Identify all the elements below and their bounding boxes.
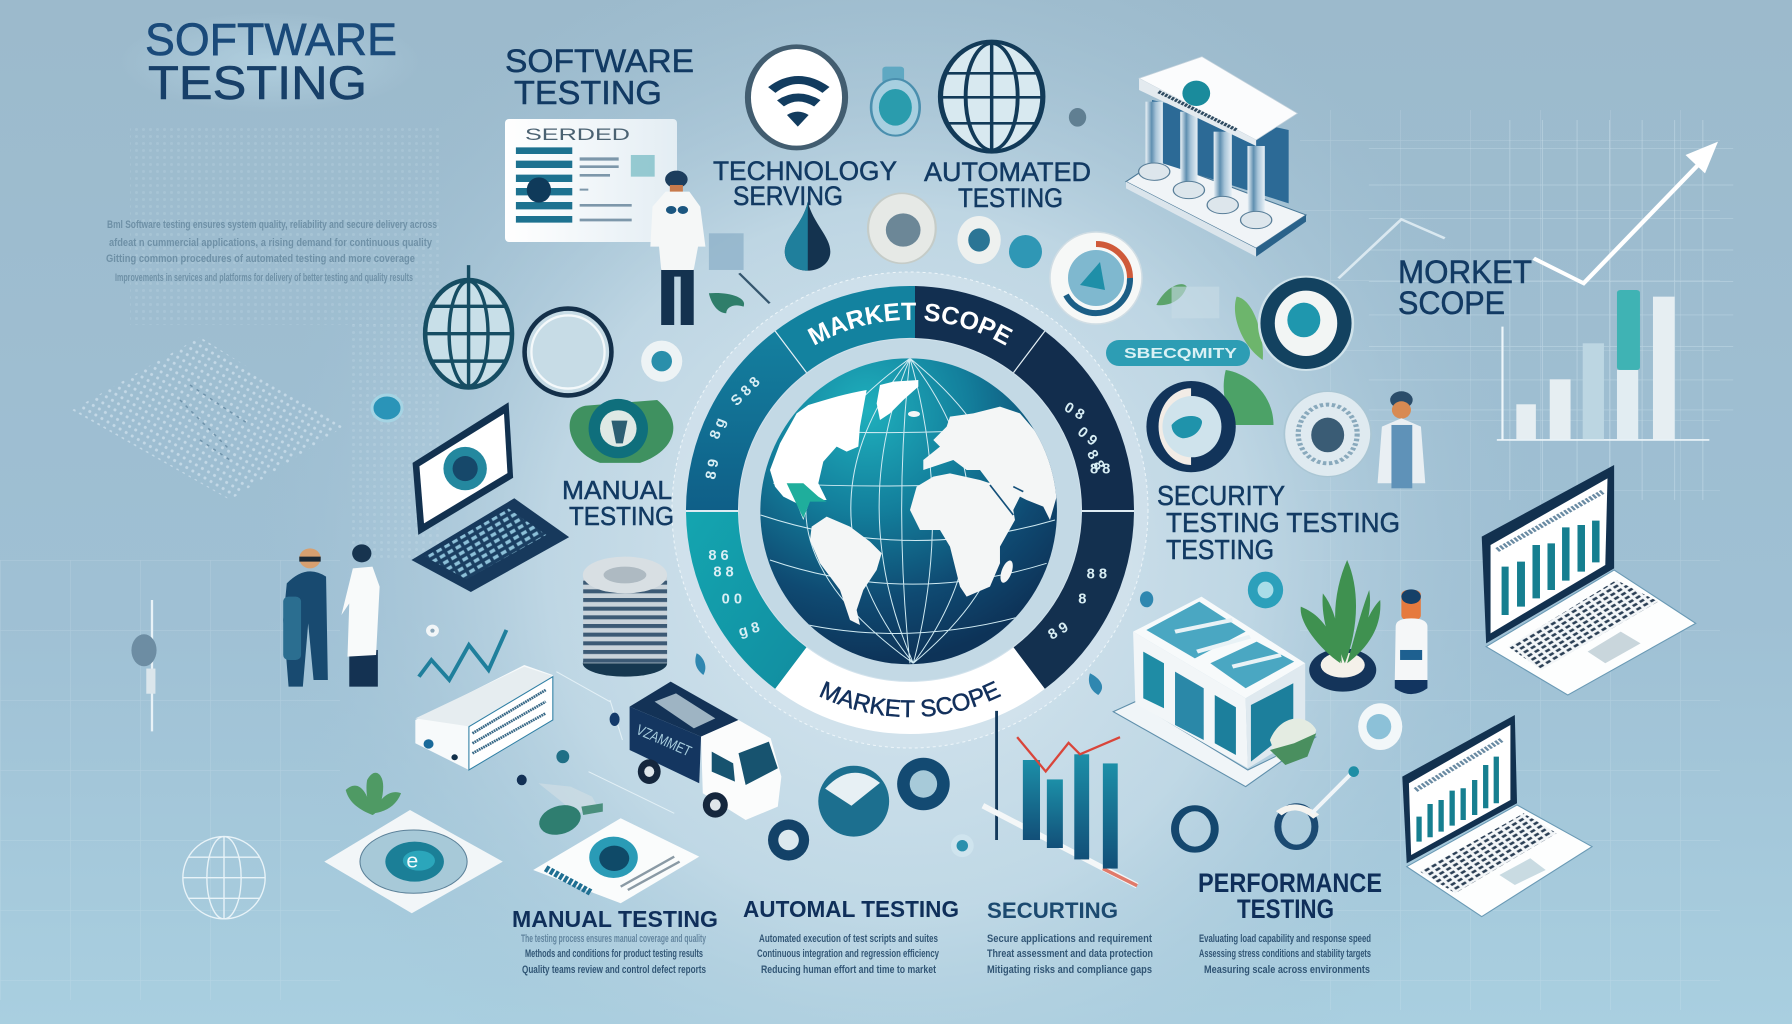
- icon: delivery truck: [630, 682, 781, 820]
- icon: lens badges: [868, 108, 1086, 268]
- heading: technology serving: [713, 156, 897, 211]
- heading: automated testing: TESTING: [958, 183, 1063, 213]
- icon: printer device with pulse line: [415, 625, 553, 770]
- Red Sea and gulf: [990, 485, 1023, 515]
- ring segment labels: 8: [1078, 591, 1086, 607]
- column: securting: SECURTING: [987, 898, 1118, 923]
- column: manual testing: MANUAL TESTING: [512, 906, 718, 932]
- heading: technology serving: SERVING: [733, 181, 843, 211]
- ring segment: top left: [775, 286, 915, 373]
- heading: market scope right: SCOPE: [1398, 285, 1505, 321]
- heading: security testing: [1157, 480, 1400, 565]
- heading: technology serving: TECHNOLOGY: [713, 156, 897, 186]
- left description text: Bml Software testing ensures system quality, reliability and secure delivery across: [107, 219, 437, 231]
- icon: data building: [1113, 597, 1316, 787]
- continent: South America: [810, 517, 882, 625]
- ring segment: top right: [915, 286, 1045, 373]
- main title: [120, 12, 420, 112]
- ring heading: market scope top: [720, 320, 1100, 510]
- icon: server stack: [583, 557, 667, 677]
- left description text: [106, 219, 437, 284]
- heading: manual testing: [562, 475, 674, 531]
- column: securting: [987, 898, 1153, 976]
- heading: market scope right: MORKET: [1398, 254, 1532, 290]
- ring segment labels: 0 0: [722, 591, 742, 607]
- heading: security testing: SECURITY: [1157, 480, 1285, 511]
- icon: security ring: [1146, 381, 1236, 472]
- globe: [760, 358, 1057, 664]
- icon: probe left: [131, 600, 157, 731]
- continent: North America: [770, 390, 867, 520]
- globe grid lines: [761, 358, 1055, 663]
- ring segment labels: 8: [747, 374, 764, 391]
- column: performance description: Evaluating load capability and response speed: [1199, 933, 1371, 945]
- icon: globe badge: [940, 42, 1043, 152]
- heading: manual testing: TESTING: [569, 501, 674, 531]
- chart: market growth: [1339, 120, 1733, 500]
- main title: TESTING: [148, 56, 367, 109]
- heading: market scope right: [1398, 254, 1532, 321]
- left description text: Gitting common procedures of automated testing and more coverage: [106, 253, 415, 265]
- icons: small feathers around ring: [695, 591, 1153, 695]
- ring segment labels: 8 8: [1090, 461, 1110, 477]
- ring segment labels: 8 9: [1046, 619, 1071, 643]
- continent: Madagascar: [1000, 560, 1013, 583]
- column: manual testing: [512, 906, 718, 976]
- central ring graphic: MARKET SCOPE: [820, 680, 1002, 718]
- growth arrow: [1339, 142, 1718, 283]
- panel: diamond eye plate: e: [406, 850, 418, 872]
- icon: seal badge: [1284, 391, 1371, 477]
- icon: green leaf: [346, 773, 401, 815]
- ring segment: bottom: [775, 647, 1045, 734]
- column: securting: Secure applications and requirement: [987, 933, 1152, 945]
- heading: software testing secondary: SOFTWARE: [505, 43, 694, 79]
- pill: security: SBECQMITY: [1124, 345, 1237, 362]
- column: automal testing: Reducing human effort and time to market: [761, 964, 936, 976]
- icon: water drop: [785, 202, 830, 271]
- ring segment labels: 8 8: [713, 565, 734, 581]
- icon: ring badges: [1175, 766, 1359, 850]
- column: performance description: [1199, 933, 1371, 976]
- column: manual testing: Methods and conditions for product testing results: [525, 948, 703, 960]
- icon: wifi badge: [748, 47, 845, 148]
- ring segment labels: [703, 374, 1110, 643]
- chart: mini bars with red trend: [983, 711, 1137, 886]
- icon: bottle: [1395, 589, 1427, 694]
- column: performance description: Assessing stress conditions and stability targets: [1199, 948, 1371, 960]
- icon: small teal eye: [641, 341, 682, 382]
- heading: manual testing: MANUAL: [562, 475, 672, 505]
- icon: globe outline left: [183, 837, 265, 919]
- ring segment: upper right: [1014, 331, 1134, 510]
- laptop: upper chart: [1482, 465, 1696, 695]
- figure: scientist with card: [650, 171, 770, 325]
- ring segment labels: g 8: [737, 620, 761, 640]
- heading: performance testing: [1198, 868, 1382, 924]
- heading: software testing secondary: TESTING: [514, 74, 662, 111]
- left description text: Improvements in services and platforms for delivery of better testing and quality results: [115, 272, 413, 284]
- panel: diamond eye plate: [324, 810, 503, 913]
- ring segment labels: 8 8: [1083, 447, 1107, 473]
- icon: delivery truck: VZAMMET: [633, 722, 694, 760]
- icon: small disks: [1248, 572, 1402, 750]
- heading: automated testing: [924, 157, 1091, 213]
- ring segment labels: 8 6: [708, 548, 729, 564]
- panel: served card: SERDED: [525, 125, 630, 144]
- column: performance description: Measuring scale across environments: [1204, 964, 1370, 976]
- ring segment labels: 8 9: [703, 458, 722, 481]
- column: automal testing: AUTOMAL TESTING: [743, 896, 959, 922]
- icon: gauge dial: [1050, 232, 1142, 324]
- icon: left globe: [425, 265, 512, 387]
- figure: analyst: [1378, 391, 1425, 488]
- ring segment labels: 8 g: [707, 416, 729, 441]
- icons: automal testing badges: [768, 758, 974, 861]
- bars: [1516, 290, 1675, 439]
- heading: security testing: TESTING: [1166, 534, 1274, 565]
- column: automal testing: Continuous integration and regression efficiency: [757, 948, 940, 960]
- column: manual testing: Quality teams review and control defect reports: [522, 964, 706, 976]
- ring segment: lower left: [686, 512, 806, 689]
- panel: served card: [505, 119, 677, 242]
- heading: software testing secondary: [505, 43, 694, 111]
- column: securting: Mitigating risks and compliance gaps: [987, 964, 1152, 976]
- icon: small badge: [871, 67, 920, 136]
- ring segment labels: 0 9: [1074, 424, 1100, 449]
- left description text: afdeat n cummercial applications, a rising demand for continuous quality: [109, 237, 433, 249]
- icon: magnifier lens: [525, 309, 611, 395]
- column: securting: Threat assessment and data protection: [987, 948, 1153, 960]
- dotted map patch: [72, 337, 343, 500]
- continent: Greenland: [877, 380, 918, 420]
- ring segment labels: 8 8: [1087, 566, 1107, 582]
- continent: Eurasia and Africa: [910, 407, 1057, 597]
- heading: performance testing: PERFORMANCE: [1198, 868, 1382, 898]
- icon: bank building: [1126, 57, 1306, 257]
- figures: two people: [283, 544, 380, 687]
- column: automal testing: [743, 896, 959, 976]
- heading: automated testing: AUTOMATED: [924, 157, 1091, 187]
- ring heading: market scope bottom: [703, 510, 1117, 717]
- icon: connector nodes: [517, 672, 674, 840]
- central ring graphic: [672, 272, 1148, 748]
- ring segment: upper left: [686, 331, 806, 510]
- column: manual testing: The testing process ensures manual coverage and quality: [521, 933, 707, 945]
- continent: Central America: [787, 483, 827, 518]
- central ring graphic: MARKET SCOPE: [807, 302, 1013, 346]
- icon: left monitor laptop: [411, 402, 569, 592]
- icon: potted plant: [1301, 560, 1380, 692]
- main title: SOFTWARE: [145, 14, 397, 65]
- ring segment: lower right: [1014, 512, 1134, 689]
- ring segment labels: 0 8: [1061, 400, 1087, 424]
- heading: performance testing: TESTING: [1237, 894, 1334, 924]
- laptop: lower chart: [1402, 715, 1592, 917]
- column: automal testing: Automated execution of test scripts and suites: [759, 933, 938, 945]
- panel: diamond report sheet: [533, 818, 699, 903]
- pill: security: [1106, 340, 1250, 366]
- icon: teal spot: [372, 395, 402, 421]
- icon: leaves badge: [570, 399, 673, 463]
- heading: security testing: TESTING TESTING: [1166, 507, 1400, 538]
- ring segment labels: S 8: [728, 383, 755, 409]
- icon: leaves and badge: [1156, 277, 1353, 425]
